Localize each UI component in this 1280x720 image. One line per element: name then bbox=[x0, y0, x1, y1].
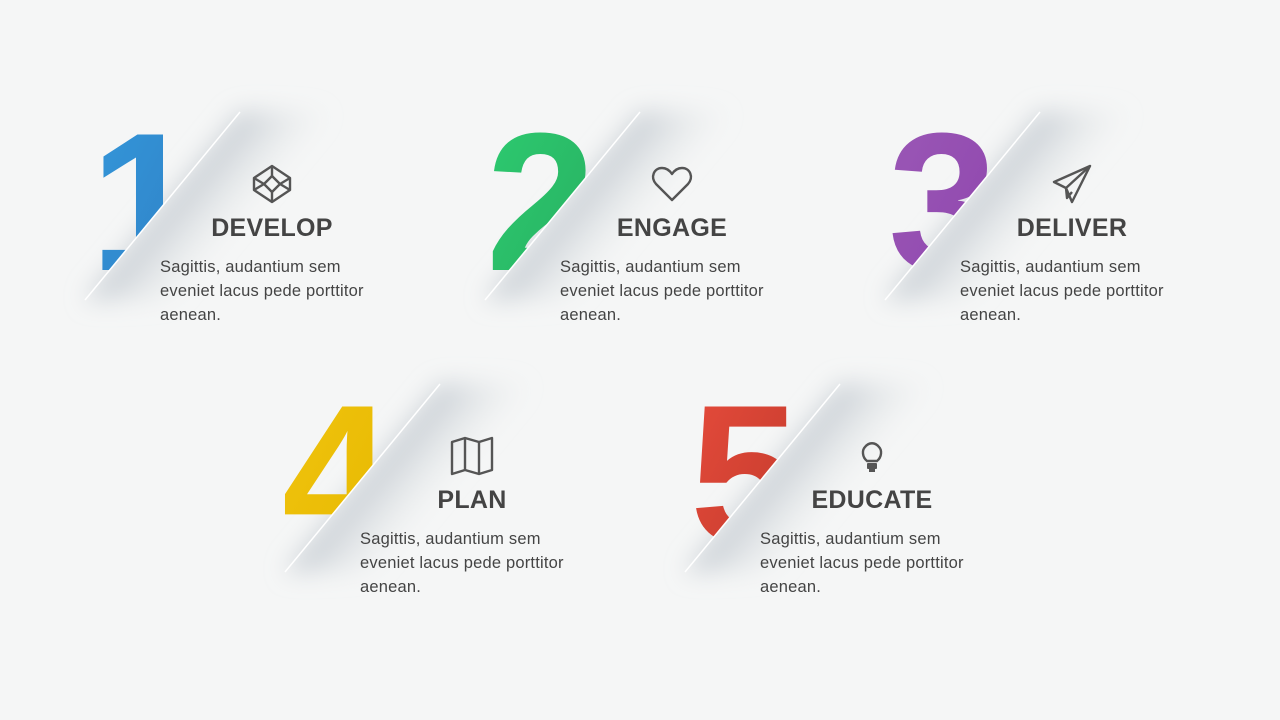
title: PLAN bbox=[437, 486, 507, 514]
card 5: educate bbox=[685, 376, 964, 596]
title: EDUCATE bbox=[811, 486, 933, 514]
text: aenean. bbox=[360, 578, 421, 596]
card 3: deliver bbox=[885, 104, 1164, 324]
text bbox=[960, 258, 1164, 324]
card 2: engage bbox=[485, 104, 764, 324]
card 5: educate: 5 bbox=[690, 364, 800, 584]
text bbox=[560, 258, 764, 324]
text: Sagittis, audantium sem bbox=[360, 530, 541, 548]
text: aenean. bbox=[560, 306, 621, 324]
title: DEVELOP bbox=[211, 214, 333, 242]
text: aenean. bbox=[760, 578, 821, 596]
icon: light bulb bbox=[862, 442, 882, 472]
text bbox=[160, 258, 364, 324]
text bbox=[760, 530, 964, 596]
text: eveniet lacus pede porttitor bbox=[760, 554, 964, 572]
icon: codepen cube bbox=[252, 164, 292, 204]
text: Sagittis, audantium sem bbox=[760, 530, 941, 548]
card 3: deliver: 3 bbox=[888, 92, 998, 312]
card 4: plan bbox=[285, 376, 564, 596]
text: eveniet lacus pede porttitor bbox=[960, 282, 1164, 300]
text: Sagittis, audantium sem bbox=[960, 258, 1141, 276]
title: ENGAGE bbox=[617, 214, 727, 242]
icon: paper plane bbox=[1052, 164, 1092, 204]
text: Sagittis, audantium sem bbox=[560, 258, 741, 276]
icon: map bbox=[450, 436, 494, 476]
card 2: engage: 2 bbox=[486, 92, 596, 312]
text: aenean. bbox=[160, 306, 221, 324]
text: Sagittis, audantium sem bbox=[160, 258, 341, 276]
card 1: develop bbox=[85, 104, 364, 324]
text: eveniet lacus pede porttitor bbox=[360, 554, 564, 572]
title: DELIVER bbox=[1017, 214, 1127, 242]
card 4: plan: 4 bbox=[282, 364, 392, 584]
text: eveniet lacus pede porttitor bbox=[560, 282, 764, 300]
text: aenean. bbox=[960, 306, 1021, 324]
icon: heart bbox=[652, 166, 692, 202]
card 1: develop: 1 bbox=[90, 92, 200, 312]
text: eveniet lacus pede porttitor bbox=[160, 282, 364, 300]
text bbox=[360, 530, 564, 596]
